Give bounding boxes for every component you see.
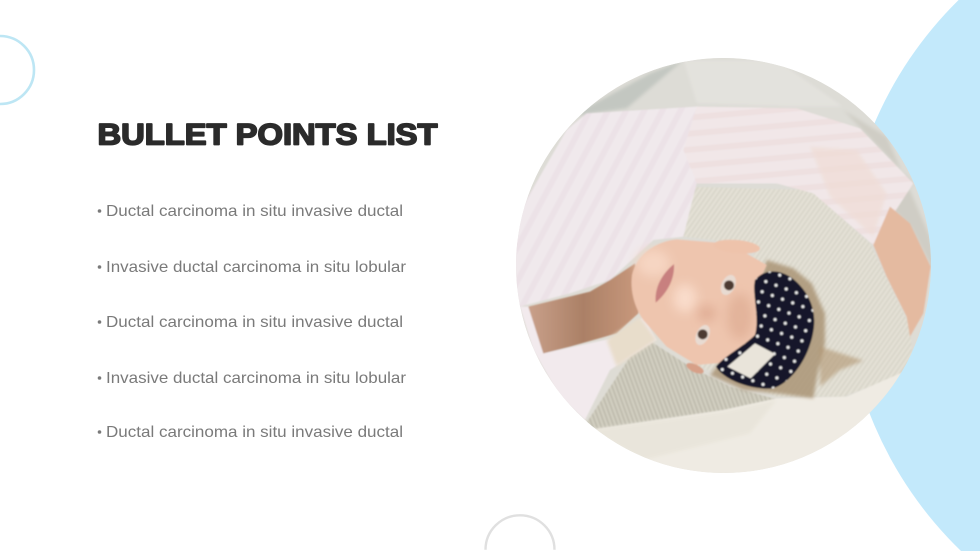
sleep mask xyxy=(716,271,814,389)
bullet item 3: Ductal carcinoma in situ invasive ductal xyxy=(106,314,403,331)
bullet item 1: Ductal carcinoma in situ invasive ductal xyxy=(106,203,403,220)
face xyxy=(631,239,767,365)
circular photo: woman lying on a bed with a polka dot sleep mask xyxy=(510,50,940,480)
bullet item 2: Invasive ductal carcinoma in situ lobular xyxy=(106,259,407,276)
title: BULLET POINTS LIST xyxy=(98,118,438,152)
shirt xyxy=(510,107,913,420)
hair xyxy=(710,260,863,398)
blue background circle xyxy=(844,0,980,551)
bullet list xyxy=(98,203,407,441)
decorative ring: bottom xyxy=(486,515,554,550)
decorative ring: top left xyxy=(0,36,34,104)
lips xyxy=(656,264,674,303)
bullet item 5: Ductal carcinoma in situ invasive ductal xyxy=(106,424,403,441)
bullet item 4: Invasive ductal carcinoma in situ lobular xyxy=(106,370,407,387)
eyes xyxy=(695,274,736,346)
